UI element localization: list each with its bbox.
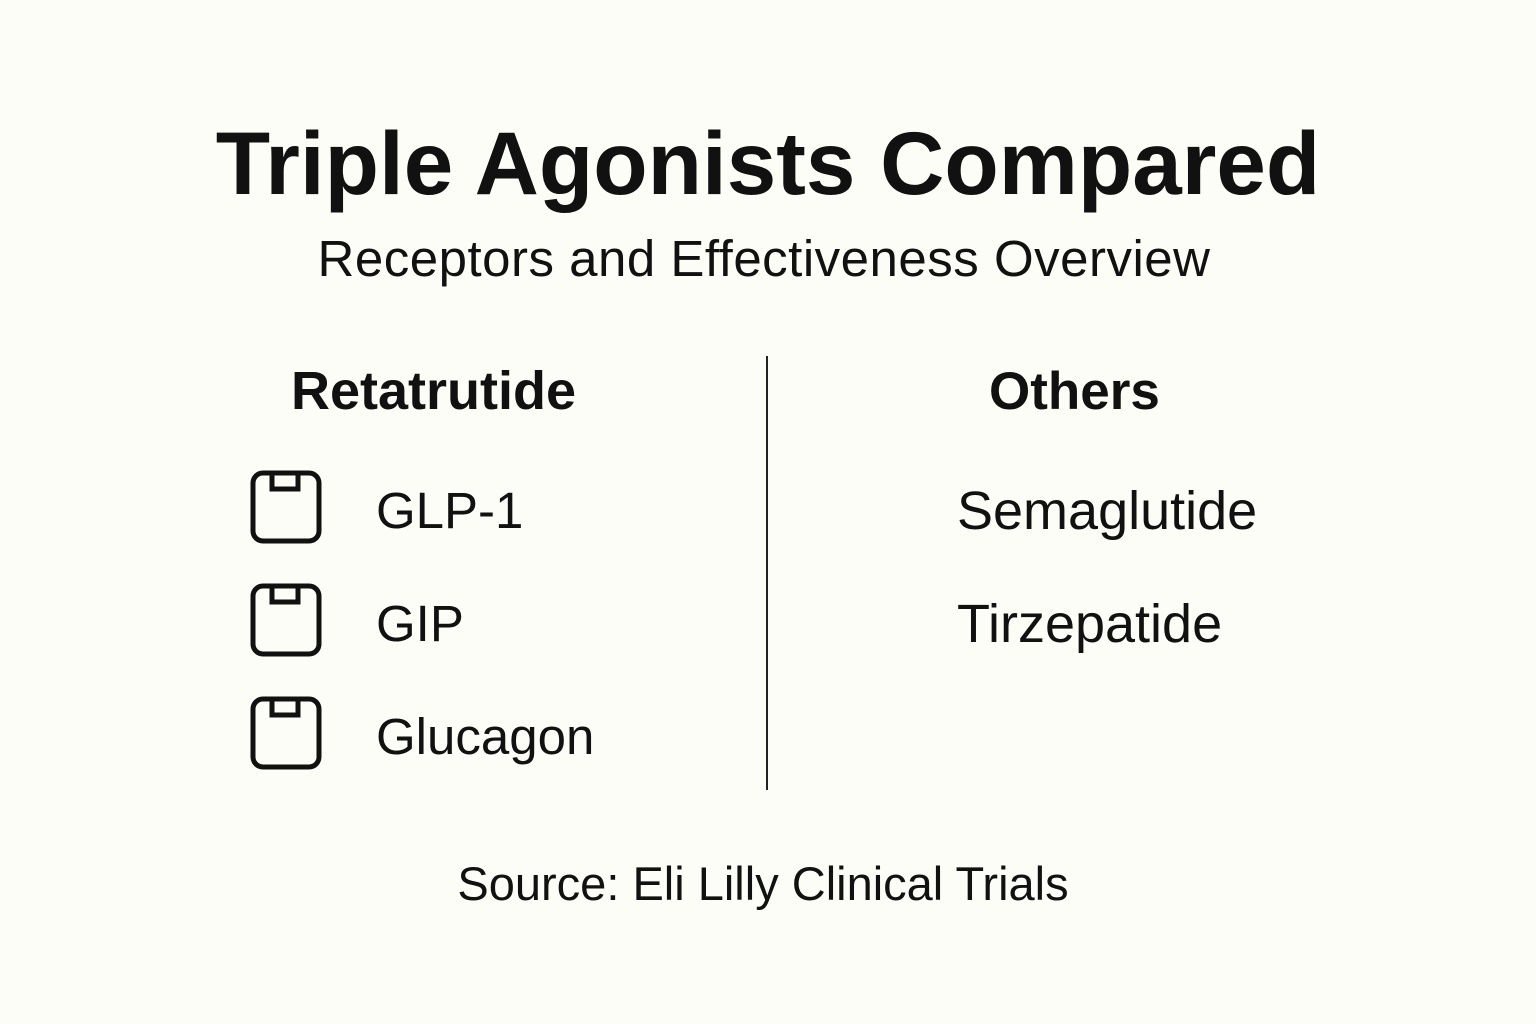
- item: Tirzepatide: Tirzepatide: [957, 594, 1222, 654]
- item: Glucagon: [250, 696, 594, 770]
- heading: Others: Others: [989, 362, 1160, 421]
- item: GIP: [250, 584, 464, 656]
- label: GLP-1: [376, 482, 523, 539]
- title: Triple Agonists Compared: [216, 113, 1320, 213]
- label: Glucagon: [376, 708, 594, 765]
- heading: Retatrutide: Retatrutide: [291, 361, 576, 421]
- label: GIP: [376, 595, 464, 652]
- divider: [766, 356, 768, 790]
- item: GLP-1: [250, 470, 523, 544]
- source: Source: Eli Lilly Clinical Trials: [457, 857, 1069, 910]
- panel: others: [957, 362, 1257, 654]
- icon: receptor: [250, 584, 322, 656]
- panel: retatrutide: [250, 361, 594, 770]
- item: Semaglutide: Semaglutide: [957, 481, 1257, 541]
- icon: receptor: [250, 470, 322, 544]
- subtitle: Receptors and Effectiveness Overview: [318, 230, 1210, 287]
- icon: receptor: [250, 696, 322, 770]
